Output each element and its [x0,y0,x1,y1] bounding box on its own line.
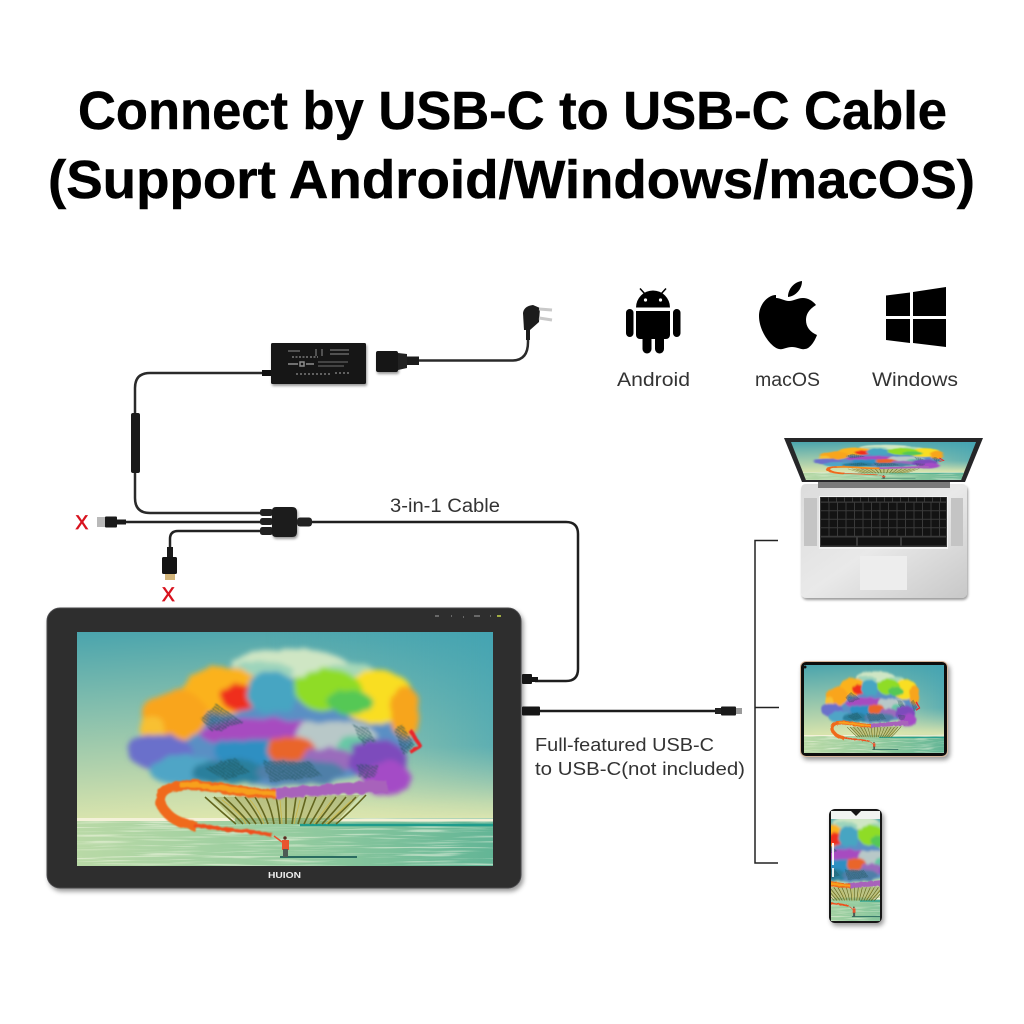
USB-C to USB-C cable [522,706,742,716]
label: full-featured cable [535,734,745,779]
phone [770,807,937,923]
label: Windows: Windows [872,370,958,391]
icon: Windows [886,287,946,347]
red X marks: X [162,585,175,606]
icon: Apple [759,281,817,349]
icon: Android [626,288,680,354]
label: full-featured cable: Full-featured USB-C [535,734,714,755]
pen display monitor [47,608,521,888]
laptop screen [784,438,983,482]
label: macOS: macOS [755,370,820,391]
device bracket [755,540,779,863]
red X marks [76,513,175,606]
monitor port connector: 3-in-1 [522,674,538,684]
USB-C connector with gold tip [162,547,177,580]
red X marks: X [76,513,88,534]
3-in-1 cable [97,370,578,681]
power cord and plug [376,305,552,372]
tablet [800,661,948,757]
power adapter [271,343,366,384]
cable hub [260,507,312,537]
USB-A connector [97,516,126,528]
title: (Support Android/Windows/macOS) [48,150,975,210]
HUION logo: HUION [268,871,301,880]
label: 3-in-1 Cable: 3-in-1 Cable [390,496,500,517]
title [48,81,975,210]
label: Android: Android [617,370,690,391]
laptop base [801,482,967,598]
laptop [784,438,983,598]
monitor screen painting [77,632,493,866]
label: full-featured cable: to USB-C(not included) [535,758,745,779]
monitor status dots [435,616,491,617]
title: Connect by USB-C to USB-C Cable [78,81,947,141]
